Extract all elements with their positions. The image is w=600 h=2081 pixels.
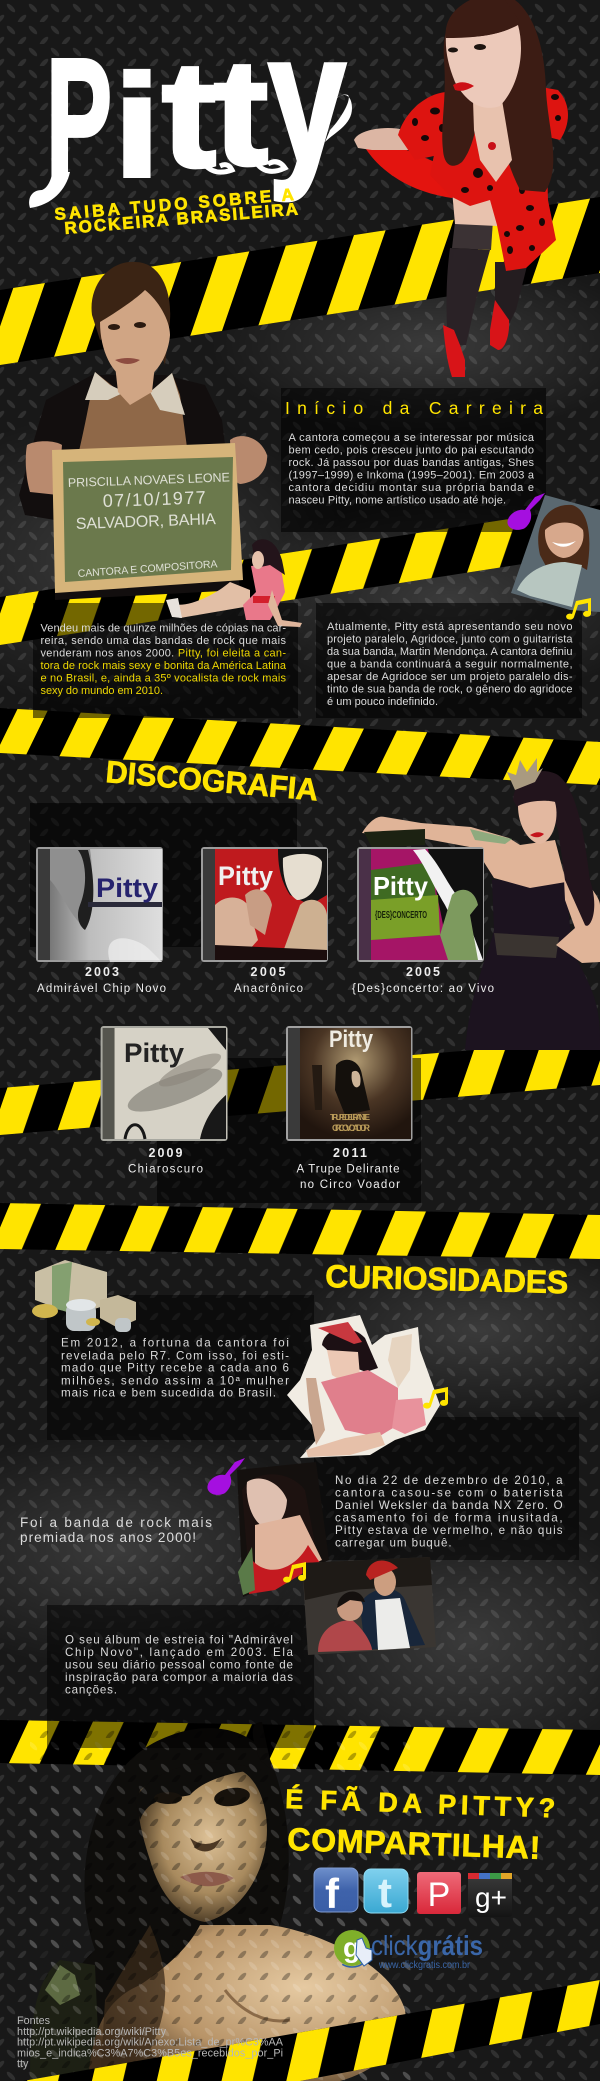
hazard stripe band 4 (0, 1040, 600, 1135)
panel: álbum de estreia (47, 1605, 314, 1748)
hazard stripe band 3 (0, 708, 600, 785)
photo: pin-up lying down, paper cut-out (287, 1315, 440, 1458)
text: vendas: Vendeu mais de quinze milhões de cópias na car- (40, 623, 286, 635)
heading: discografia: DISCOGRAFIA (104, 754, 320, 808)
album captions: 2005 (250, 965, 286, 979)
hazard stripe band 6 (0, 1720, 600, 1775)
album: A Trupe Delirante no Circo Voador (286, 1026, 412, 1141)
chalkboard text: CANTORA E COMPOSITORA (77, 558, 218, 580)
text: banda mais premiada: Foi a banda de rock mais (20, 1515, 212, 1530)
text: álbum de estreia: usou seu diário pessoal como fonte de (65, 1658, 293, 1671)
photo: pin-up sitting (166, 539, 302, 627)
panel: discografia inferior (157, 1058, 421, 1203)
panel: casamento (314, 1417, 579, 1560)
logo: clickgrátis: g (343, 1932, 360, 1963)
text: casamento: carregar um buquê. (335, 1537, 452, 1550)
text: início da carreira: nasceu Pitty, nome artístico usado até hoje. (288, 494, 506, 506)
text: atualmente: que a banda continuará a seguir normalmente, (327, 658, 572, 670)
album: Anacrônico (201, 847, 328, 962)
text: atualmente: da sua banda, Martin Mendonça. A cantora definiu (327, 646, 572, 658)
photo: Pitty with Daniel Weksler (302, 1557, 436, 1655)
text: vendas: sexy do mundo em 2010. (40, 685, 163, 697)
chalkboard text: 07/10/1977 (102, 487, 206, 511)
chalkboard text: SALVADOR, BAHIA (76, 511, 216, 533)
text: atualmente: projeto paralelo, Agridoce, junto com o guitarrista (327, 634, 573, 646)
panel: início da carreira (281, 388, 546, 532)
logo: clickgrátis: clickgrátis (371, 1930, 483, 1961)
icon: music note (423, 1387, 448, 1409)
text: vendas (40, 623, 287, 697)
panel: vendas (33, 603, 298, 718)
text: atualmente: tinto de sua banda de rock, o gênero do agridoce (327, 683, 572, 695)
icon: google plus (468, 1873, 512, 1917)
album captions (37, 965, 494, 1191)
text: fortuna: milhões, sendo assim a 10ª mulher (61, 1374, 289, 1387)
icon: music note (283, 1562, 306, 1583)
icon: twitter: t (378, 1869, 392, 1916)
album captions: Admirável Chip Novo (37, 983, 166, 995)
album captions: A Trupe Delirante (296, 1164, 400, 1176)
icon: money stacks (32, 1260, 136, 1332)
heading: é fã da pitty: É FÃ DA PITTY? (285, 1783, 556, 1823)
logo: clickgrátis: www.clickgratis.com.br (378, 1960, 471, 1971)
text: início da carreira: bem cedo, pois cresceu junto do pai escutando (288, 445, 534, 457)
icon: pinterest (417, 1872, 461, 1914)
heading: compartilha: COMPARTILHA! (287, 1821, 541, 1866)
text: atualmente: apesar de Agridoce ser um projeto paralelo dis- (327, 671, 573, 683)
photo: Pitty with crown (362, 758, 600, 1050)
text: início da carreira: A cantora começou a se interessar por música (288, 432, 535, 444)
album captions: 2003 (85, 965, 119, 979)
album: Admirável Chip Novo: Pitty (96, 873, 158, 903)
tagline: ROCKEIRA BRASILEIRA (64, 199, 299, 238)
logo: Pitty: y (268, 0, 346, 202)
text: álbum de estreia: O seu álbum de estreia foi "Admirável (65, 1633, 293, 1646)
text: atualmente: é um pouco indefinido. (327, 696, 438, 708)
album captions: 2011 (333, 1146, 367, 1160)
text: fontes: mios_e_indica%C3%A7%C3%B5es_recebidos_por_Pi (17, 2048, 283, 2060)
text: fontes: Fontes (17, 2015, 51, 2027)
text: fontes: http://pt.wikipedia.org/wiki/Pitty (17, 2026, 167, 2038)
text: vendas: reira, sendo uma das bandas de rock que mais (40, 635, 286, 647)
text: banda mais premiada (20, 1515, 212, 1545)
logo: Pitty: i (114, 45, 160, 207)
panel: fortuna (47, 1295, 314, 1440)
text: casamento: Daniel Weksler da banda NX Zero. O (335, 1499, 563, 1512)
album: Admirável Chip Novo (36, 847, 163, 962)
hazard stripe band 2 (0, 505, 600, 645)
text: fortuna: mado que Pitty recebe a cada ano 6 (61, 1362, 289, 1375)
icon: facebook (314, 1868, 358, 1917)
text: vendas: venderam nos anos 2000. Pitty, foi eleita a can- (40, 648, 286, 660)
text: início da carreira: (1997–1999) e Inkoma (1995–2001). Em 2003 a (288, 469, 535, 481)
logo: Pitty: P (46, 24, 112, 214)
hazard stripe band 7 (0, 1980, 600, 2081)
text: casamento: casamento foi de forma inusitada, (335, 1512, 563, 1525)
text: banda mais premiada: premiada nos anos 2000! (20, 1530, 196, 1545)
album captions: Chiaroscuro (128, 1164, 203, 1176)
text: casamento: cantora casou-se com o baterista (335, 1487, 563, 1500)
album: (Des)concerto ao Vivo (357, 847, 484, 962)
icon: purple guitar (207, 1458, 245, 1495)
text: fortuna: mais rica e bem sucedida do Brasil. (61, 1387, 276, 1400)
text: início da carreira (288, 432, 535, 506)
album captions: 2009 (148, 1146, 183, 1160)
text: fortuna (61, 1337, 289, 1400)
text: início da carreira: cantora decidiu montar sua própria banda e (288, 482, 534, 494)
text: fortuna: revelada pelo R7. Com isso, foi esti- (61, 1349, 289, 1362)
text: fontes: tty (17, 2058, 29, 2070)
logo: Pitty: t (214, 28, 268, 196)
album captions: no Circo Voador (300, 1179, 400, 1191)
photo: Pitty as a child (511, 495, 600, 612)
text: casamento: Pitty estava de vermelho, e não quis (335, 1524, 563, 1537)
text: casamento (335, 1474, 563, 1550)
icon: google plus: g+ (475, 1882, 507, 1913)
album: Chiaroscuro: Pitty (124, 1038, 184, 1068)
text: fortuna: Em 2012, a fortuna da cantora foi (61, 1337, 289, 1350)
text: álbum de estreia: canções. (65, 1683, 117, 1696)
logo: Pitty: t (162, 30, 216, 198)
album: A Trupe Delirante no Circo Voador: CIRCO VOADOR (332, 1123, 370, 1133)
album: Chiaroscuro (101, 1026, 228, 1141)
text: vendas: e no Brasil, e, ainda a 35º vocalista de rock mais (40, 673, 286, 685)
text: vendas: tora de rock mais sexy e bonita da América Latina (40, 660, 287, 672)
album captions: 2005 (406, 965, 440, 979)
text: álbum de estreia: Chip Novo", lançado em 2003. Ela (65, 1646, 294, 1659)
hazard stripe band 1 (0, 197, 600, 365)
panel: discografia superior (30, 803, 297, 947)
album captions: Anacrônico (234, 983, 303, 995)
album: (Des)concerto ao Vivo: Pitty (373, 871, 429, 901)
icon: pinterest: P (428, 1876, 450, 1914)
logo: Pitty (29, 0, 352, 214)
logo: clickgrátis (333, 1929, 483, 1971)
panel: atualmente (316, 603, 582, 718)
photo: woman at the bottom (30, 1722, 410, 2081)
text: início da carreira: rock. Já passou por duas bandas antigas, Shes (288, 457, 534, 469)
album captions: {Des}concerto: ao Vivo (352, 983, 494, 995)
icon: music note (566, 598, 591, 620)
photo: Pitty holding chalkboard (19, 262, 267, 600)
text: atualmente (327, 621, 573, 708)
icon: twitter (364, 1869, 408, 1916)
chalkboard text: PRISCILLA NOVAES LEONE (68, 470, 230, 490)
icon: purple guitar (507, 493, 545, 530)
album: A Trupe Delirante no Circo Voador: TRUPE DELIRANTE (330, 1113, 371, 1122)
text: álbum de estreia (65, 1633, 294, 1696)
album: (Des)concerto ao Vivo: {DES}CONCERTO (375, 910, 427, 921)
photo: Pitty in red top (237, 1462, 329, 1597)
album: A Trupe Delirante no Circo Voador: Pitty (329, 1026, 374, 1053)
hazard stripe band 5 (0, 1203, 600, 1259)
album: Anacrônico: Pitty (218, 861, 273, 891)
photo: Pitty in red polka-dot dress (354, 0, 568, 377)
text: atualmente: Atualmente, Pitty está apresentando seu novo (327, 621, 572, 633)
text: álbum de estreia: inspiração para compor a maioria das (65, 1671, 293, 1684)
text: casamento: No dia 22 de dezembro de 2010, a (335, 1474, 563, 1487)
tagline: SAIBA TUDO SOBRE A (54, 185, 294, 224)
chalkboard text (68, 470, 230, 580)
text: fontes: http://pt.wikipedia.org/wiki/Anexo:Lista_de_pr%C3%AA (17, 2037, 284, 2049)
heading: curiosidades: CURIOSIDADES (325, 1258, 569, 1300)
text: fontes (17, 2015, 284, 2070)
icon: facebook: f (325, 1870, 340, 1917)
heading: início da carreira: Início da Carreira (285, 398, 543, 418)
